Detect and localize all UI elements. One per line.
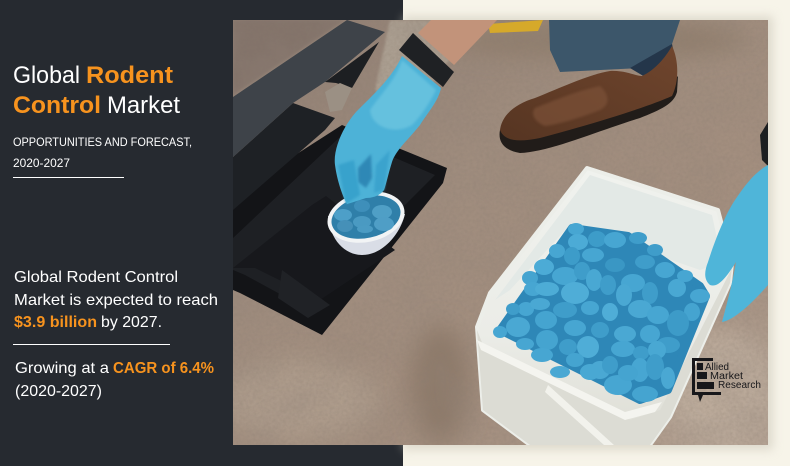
- shoe: [500, 46, 678, 153]
- subtitle: 2020-2027: [13, 156, 70, 170]
- cup: [328, 192, 405, 255]
- pellets mass: [500, 228, 706, 400]
- CAGR statement: Growing at a: [15, 360, 109, 377]
- subtitle: OPPORTUNITIES AND FORECAST,: [13, 135, 192, 149]
- CAGR statement: [15, 360, 214, 400]
- lid hinge wall: [325, 42, 379, 88]
- right blue glove: [705, 165, 768, 322]
- market size statement: Market is expected to reach: [14, 292, 218, 309]
- market size statement: [14, 269, 218, 331]
- logo: Allied Market Research: Allied: [705, 362, 729, 373]
- market size statement: by 2027.: [101, 314, 162, 331]
- photo shadow: [403, 16, 773, 450]
- tub of bait pellets: [477, 168, 732, 445]
- wristwatch: [399, 33, 454, 87]
- box inner floor: [233, 135, 435, 305]
- logo: Allied Market Research: [692, 358, 761, 402]
- yellow object: [488, 20, 543, 33]
- title: Market: [107, 92, 180, 119]
- title: Rodent: [86, 62, 173, 89]
- CAGR statement: (2020-2027): [15, 383, 102, 400]
- box lid interior: [233, 103, 335, 210]
- bait box: [233, 20, 447, 335]
- concrete ground: [233, 20, 768, 445]
- logo: Allied Market Research: Research: [718, 380, 761, 391]
- box lid: [233, 20, 385, 157]
- subtitle: [13, 135, 192, 170]
- dark object at right edge: [760, 122, 768, 166]
- forearm: [418, 20, 497, 65]
- photo: technician placing blue rodent bait: [220, 20, 780, 450]
- title: [13, 62, 180, 119]
- CAGR statement: CAGR of 6.4%: [113, 360, 214, 377]
- tub handle: [545, 385, 614, 445]
- trousers: [549, 20, 680, 72]
- blue glove: [335, 56, 441, 204]
- logo: Allied Market Research: Market: [710, 371, 743, 382]
- pellets: [493, 223, 710, 402]
- box base: [233, 125, 447, 335]
- panel: dark left background: [0, 0, 403, 466]
- tub inner wall: [495, 175, 722, 300]
- title: Control: [13, 92, 101, 119]
- title: Global: [13, 62, 80, 89]
- tub rim lower: [477, 268, 732, 445]
- market size statement: Global Rodent Control: [14, 269, 178, 286]
- tub body: [477, 168, 732, 445]
- panel: cream right background: [403, 0, 790, 466]
- market size statement: $3.9 billion: [14, 314, 97, 331]
- sock: [630, 44, 673, 76]
